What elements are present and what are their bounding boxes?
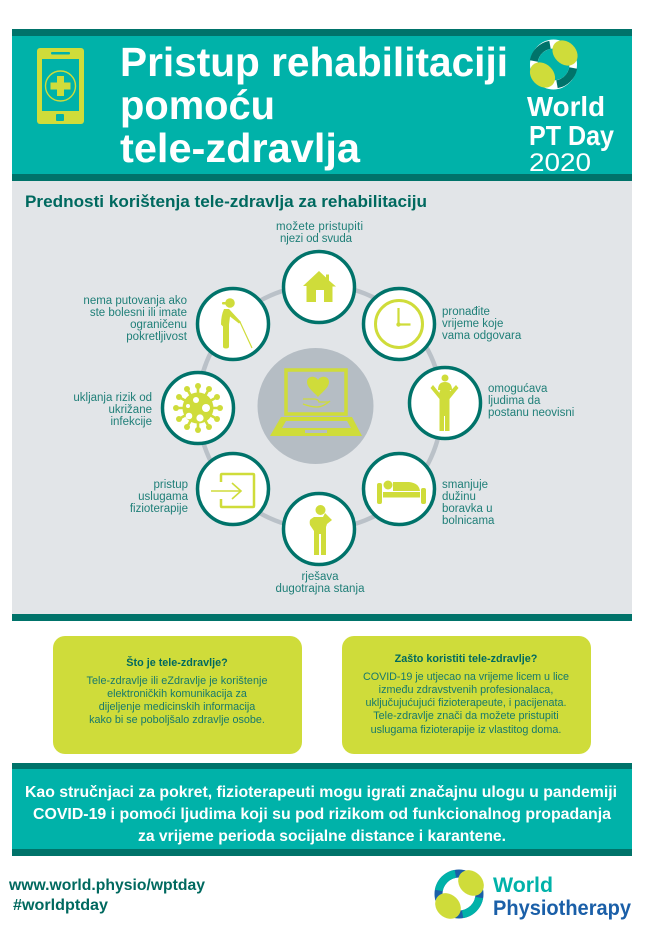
benefit: independence: ljudima da [488,395,541,407]
banner: key message [12,763,632,856]
title: pomoću [120,82,275,128]
benefit: access from anywhere [276,221,363,322]
icon: phone with medical cross [37,48,84,124]
benefit: removes cross-infection risk [73,372,234,444]
logo: World PT Day 2020: PT Day [529,120,614,151]
benefit: shorter hospital stay: smanjuje [442,479,488,491]
benefit: access to physiotherapy: uslugama [138,491,189,503]
benefit: removes cross-infection risk: uklјanja rizik od [73,392,152,404]
banner: key message: Kao stručnjaci za pokret, fizioterapeuti mogu igrati značajnu ulogu u pandemiji [25,784,617,801]
benefit: no travel needed: pokretljivost [126,331,188,343]
banner: key message: COVID-19 i pomoći ljudima koji su pod rizikom od funkcionalnog propadanja [33,806,611,823]
title: Pristup rehabilitaciji [120,39,508,85]
header band [12,29,632,181]
benefit: shorter hospital stay [364,454,495,527]
benefit: time that suits you: pronađite [442,306,490,318]
icon: person in bed [377,480,426,504]
benefit: chronic conditions: dugotrajna stanja [276,583,365,595]
benefit: independence: omogućava [488,383,548,395]
title: tele-zdravlja [120,125,360,171]
title [120,39,508,171]
icon: enter arrow [211,474,254,507]
info box: why use telehealth: između zdravstvenih profesionalaca, [379,684,553,696]
logo: World PT Day 2020 [525,35,614,177]
logo: World Physiotherapy [430,865,631,924]
benefit: access to physiotherapy [130,454,268,524]
benefit: shorter hospital stay: boravka u [442,503,493,515]
icon: clock [376,300,422,348]
info box: why use telehealth: uključujućujući fizioterapeute, i pacijenata. [365,697,567,709]
benefit: removes cross-infection risk: infekcije [110,416,152,428]
benefit: independence [410,368,574,438]
icon: laptop with heart [258,348,374,464]
info box: why use telehealth: uslugama fizioterapije iz vlastitog doma. [371,724,561,736]
info box: what is telehealth: kako bi se poboljšalo zdravlje osobe. [89,714,265,726]
banner: key message: za vrijeme perioda socijalne distance i karantene. [138,828,506,845]
icon: person with cane [221,298,252,348]
info box: what is telehealth: Tele-zdravlje ili eZdravlje je korištenje [86,675,268,687]
benefit: no travel needed: nema putovanja ako [83,295,187,307]
benefit: time that suits you: vrijeme koje [442,318,503,330]
hashtag: #worldptday [13,897,108,914]
website link: www.world.physio/wptday [8,877,205,894]
benefit: access from anywhere: možete pristupiti [276,221,363,233]
benefit: shorter hospital stay: dužinu [442,491,476,503]
icon: virus [173,383,223,433]
benefit: time that suits you [364,288,522,360]
benefit: shorter hospital stay: bolnicama [442,515,495,527]
heading: benefits: Prednosti korištenja tele-zdravlja za rehabilitaciju [25,193,427,211]
icon: house [303,271,336,302]
info box: what is telehealth: dijeljenje medicinskih informacija [99,701,255,713]
icon: thinking person [310,505,332,555]
benefit: chronic conditions: rješava [301,571,339,583]
info box: what is telehealth: Što je tele-zdravlje? [126,656,228,669]
ring connecting the benefits [198,285,442,529]
info box: what is telehealth [53,636,302,754]
benefit: no travel needed: ste bolesni ili imate [90,307,187,319]
info box: why use telehealth [342,636,591,754]
logo: World PT Day 2020: 2020 [529,149,591,177]
panel: benefits [12,181,632,621]
benefit: no travel needed [83,288,268,360]
logo: World Physiotherapy: World [493,873,553,897]
info box: why use telehealth: Zašto koristiti tele-zdravlje? [395,653,537,665]
benefit: chronic conditions [276,494,365,595]
benefit: access to physiotherapy: fizioterapije [130,503,188,515]
icon: person carrying child [430,374,458,431]
benefit: time that suits you: vama odgovara [442,330,522,342]
benefit: access to physiotherapy: pristup [153,479,188,491]
logo: World PT Day 2020: World [527,91,605,122]
benefit: removes cross-infection risk: ukrižane [109,404,152,416]
info box: what is telehealth: elektroničkih komunikacija za [107,688,247,700]
logo: World Physiotherapy: Physiotherapy [493,896,631,920]
info box: why use telehealth: COVID-19 je utjecao na vrijeme licem u lice [363,671,569,683]
benefit: access from anywhere: njezi od svuda [280,233,353,245]
benefit: no travel needed: ograničenu [130,319,187,331]
benefit: independence: postanu neovisni [488,407,574,419]
info box: why use telehealth: Tele-zdravlje znači da možete pristupiti [373,710,559,722]
